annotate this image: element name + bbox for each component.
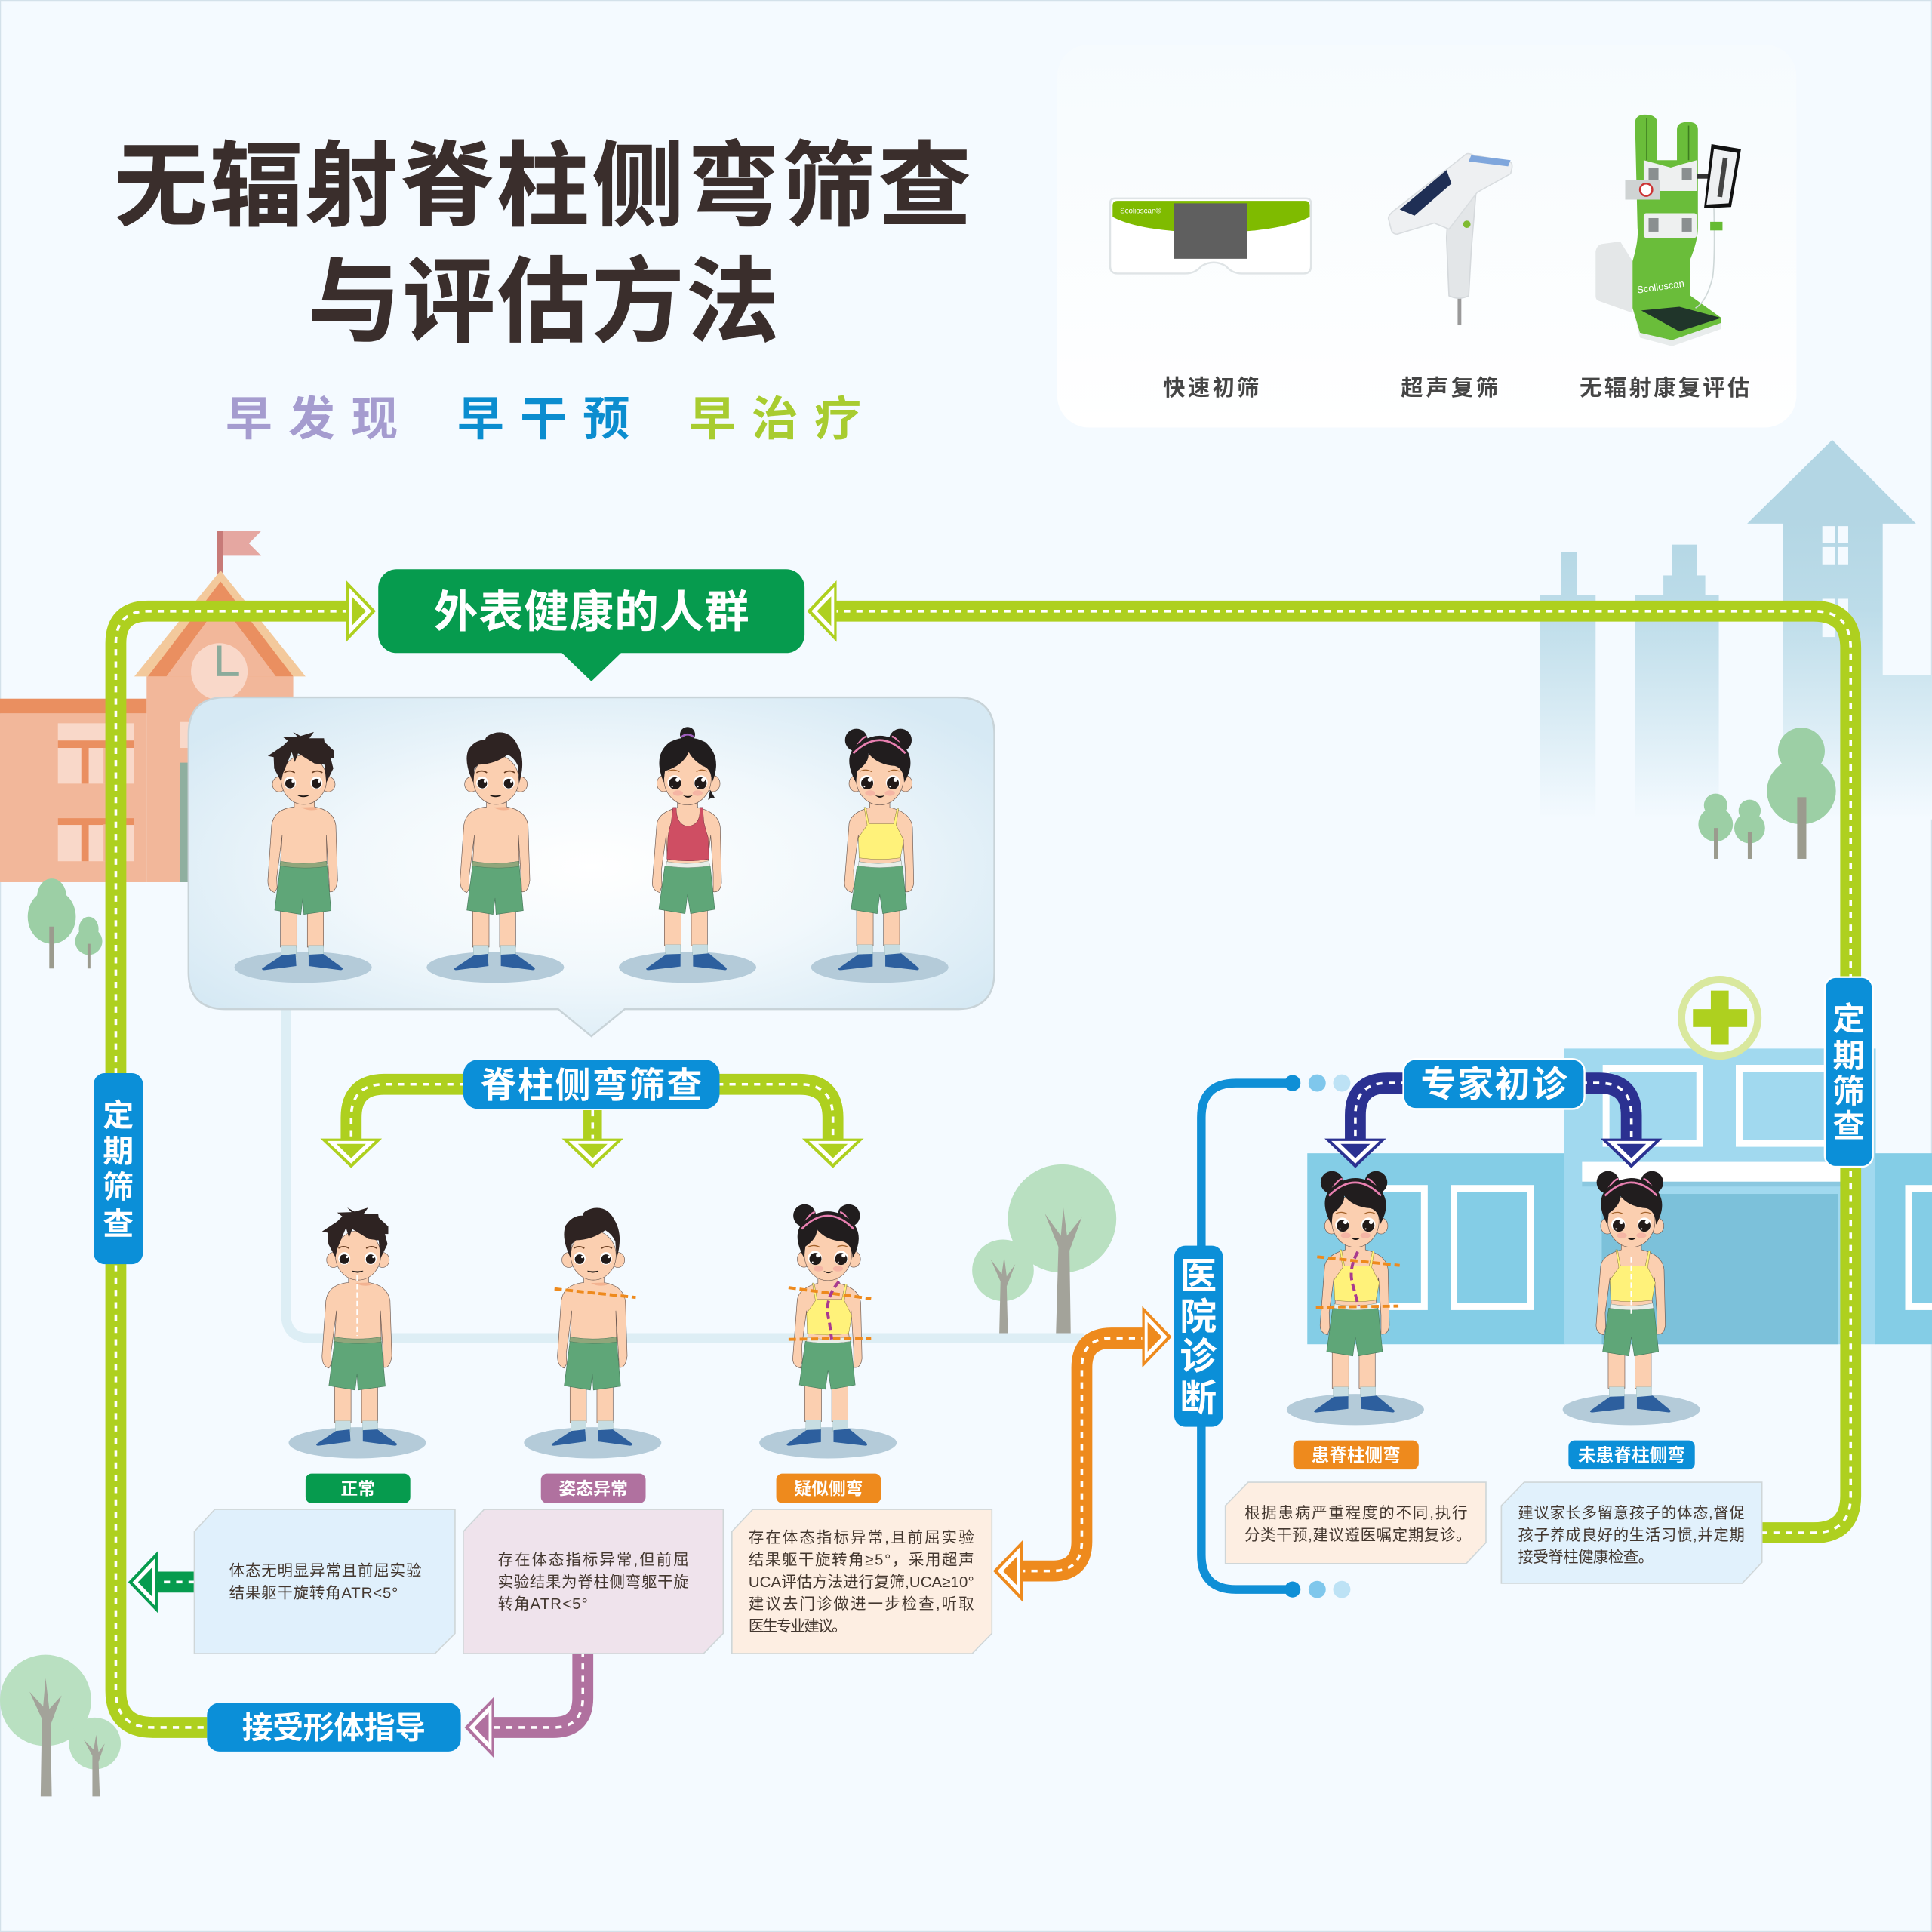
child: scoliosis patient girl [1287,1171,1424,1425]
arrow: to normal [320,1139,382,1168]
tag: no scoliosis [1568,1441,1695,1469]
tag: has scoliosis [1294,1441,1419,1469]
child: girl red top [619,727,756,983]
arrow: to scoliosis patient [1324,1139,1386,1168]
badge: hospital diagnosis [1174,1246,1223,1427]
arrow: to suspected scoliosis box [993,1540,1023,1601]
badge: regular screening right: 定 [1833,1001,1865,1037]
road: left green loop [115,611,349,1727]
text box: non patient advice: 接受脊柱健康检查。 [1518,1549,1654,1566]
text box: posture abnormal [463,1509,723,1654]
badge: hospital diagnosis: 院 [1180,1297,1217,1338]
badge: regular screening right [1825,977,1873,1167]
badge: hospital diagnosis: 医 [1180,1257,1217,1297]
school building [0,531,306,882]
heading: scoliosis screening: 脊柱侧弯筛查 [481,1066,703,1106]
road: green from normal box [155,1576,197,1589]
text box: patient advice [1226,1482,1486,1564]
tag: posture abnormal: 姿态异常 [558,1478,628,1498]
trees middle [972,1164,1116,1334]
subtitle: three earlies: 早干预 [457,393,629,445]
shoulder line [555,1289,635,1297]
arrow: to suspected scoliosis [802,1139,863,1168]
child: girl yellow top [811,729,949,983]
tag: no scoliosis: 未患脊柱侧弯 [1578,1444,1685,1466]
arrow: to hospital [1142,1306,1172,1367]
subtitle: three earlies: 早治疗 [689,393,861,445]
text box: non patient advice: 建议家长多留意孩子的体态,督促 [1518,1504,1745,1521]
icon: quick screening card device: Scolioscan® [1120,207,1161,215]
text box: posture abnormal: 存在体态指标异常,但前屈 [498,1551,689,1568]
text box: suspected scoliosis [732,1509,992,1654]
child: suspected scoliosis girl [759,1204,897,1459]
tag: posture abnormal [541,1474,646,1503]
device labels: 超声复筛 [1401,376,1498,401]
arrow: into healthy group right [807,580,837,642]
badge: regular screening left [94,1073,143,1264]
device labels [1163,376,1749,401]
icon: quick screening card device [1110,198,1311,273]
panel: four children [189,697,995,1036]
text box: suspected scoliosis: 医生专业建议。 [749,1618,847,1635]
badge: regular screening right: 查 [1833,1109,1865,1144]
child: normal boy [288,1208,426,1459]
bracket: hospital diagnosis [1201,1075,1350,1598]
text box: non patient advice [1501,1482,1762,1583]
title: 与评估方法 [308,250,779,353]
heading: healthy group [378,569,804,681]
badge: regular screening left: 筛 [103,1170,134,1204]
background: city buildings [1540,440,1932,820]
badge: hospital diagnosis: 断 [1180,1378,1217,1419]
badge: hospital diagnosis: 诊 [1180,1337,1217,1377]
text box: normal: 结果躯干旋转角ATR<5° [229,1585,398,1602]
tag: suspected scoliosis [777,1474,881,1503]
tag: has scoliosis: 患脊柱侧弯 [1312,1444,1401,1466]
badge: regular screening left: 定 [103,1098,134,1133]
badge: regular screening left: 查 [103,1207,134,1241]
hospital building [1307,1048,1932,1344]
heading: healthy group: 外表健康的人群 [434,588,749,637]
flag [217,531,261,580]
clock [191,643,248,700]
heading: expert consult: 专家初诊 [1420,1065,1567,1105]
text box: patient advice: 分类干预,建议遵医嘱定期复诊。 [1244,1527,1471,1544]
text box: normal: 体态无明显异常且前屈实验 [229,1562,421,1580]
road: navy expert branches [1355,1083,1632,1141]
text box: suspected scoliosis: 存在体态指标异常,且前屈实验 [749,1529,974,1546]
text box: non patient advice: 孩子养成良好的生活习惯,并定期 [1518,1527,1745,1544]
icon: radiation-free rehabilitation scanner [1595,115,1741,346]
title: 无辐射脊柱侧弯筛查 [115,134,971,238]
child: posture abnormal boy [524,1208,661,1459]
child: boy spiky hair [235,732,372,983]
panel: devices [1057,45,1796,428]
badge: regular screening right: 期 [1833,1038,1865,1074]
icon: radiation-free rehabilitation scanner: Scolioscan [1636,278,1685,296]
tag: suspected scoliosis: 疑似侧弯 [794,1478,863,1498]
heading: posture guidance [207,1703,461,1752]
trees bottom left [0,1655,121,1796]
text box: suspected scoliosis: UCA评估方法进行复筛,UCA≥10° [749,1574,974,1591]
text box: patient advice: 根据患病严重程度的不同,执行 [1244,1504,1467,1521]
badge: regular screening right: 筛 [1833,1074,1865,1109]
scoliosis lines on patient [1316,1252,1400,1307]
text box: normal [194,1509,455,1654]
device labels: 无辐射康复评估 [1580,376,1749,401]
text box: suspected scoliosis: 结果躯干旋转角≥5°，采用超声 [749,1551,974,1568]
arrow: to posture abnormal [561,1139,623,1168]
arrow: into healthy group left [346,580,376,642]
icon: hospital cross [1681,980,1758,1056]
text box: posture abnormal: 转角ATR<5° [498,1595,588,1613]
road: purple to posture guidance [491,1651,583,1727]
road: screening branches [351,1084,833,1141]
child: non patient girl [1563,1171,1700,1425]
light connector line [286,1004,1084,1338]
title [115,134,971,353]
arrow: to non patient [1601,1139,1662,1168]
heading: posture guidance: 接受形体指导 [242,1711,426,1746]
subtitle: three earlies [226,393,861,445]
icon: handheld ultrasound scanner [1389,154,1512,325]
scoliosis lines on girl [789,1281,871,1340]
child: boy swept hair [426,732,564,983]
text box: posture abnormal: 实验结果为脊柱侧弯躯干旋 [498,1574,689,1591]
tag: normal: 正常 [340,1478,375,1498]
road: top and right green loop [832,611,1850,1533]
tag: normal [306,1474,411,1503]
trees left [28,878,103,968]
badge: regular screening left: 期 [103,1134,134,1169]
arrow: normal back to loop [128,1552,158,1613]
road: orange to hospital [1019,1338,1146,1571]
trees right [1698,728,1836,859]
heading: expert consult [1404,1059,1585,1109]
text box: suspected scoliosis: 建议去门诊做进一步检查,听取 [749,1595,974,1613]
arrow: to posture guidance [465,1697,494,1758]
subtitle: three earlies: 早发现 [226,393,398,445]
device labels: 快速初筛 [1163,376,1260,401]
